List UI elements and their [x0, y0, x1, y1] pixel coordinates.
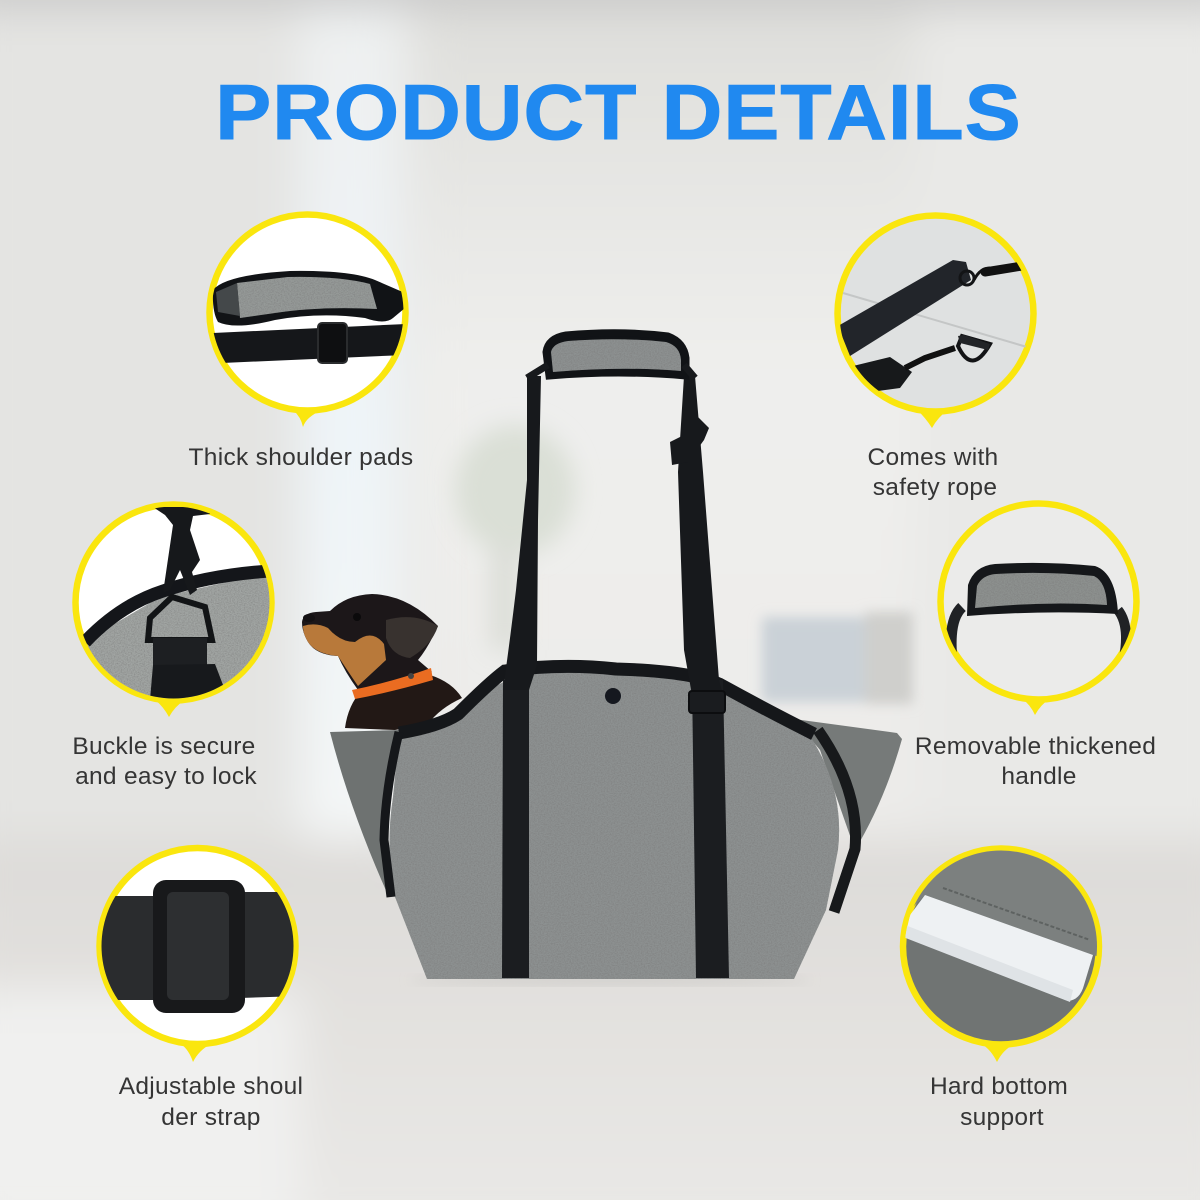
detail: hard bottom [900, 840, 1110, 1131]
close-up image [838, 260, 1027, 392]
dog [302, 594, 462, 730]
shoulder strap right [678, 376, 723, 695]
shoulder strap left [503, 376, 541, 690]
dog head [302, 594, 438, 690]
callout bubble [903, 848, 1099, 1062]
callout bubble [76, 504, 272, 717]
floor shadow [410, 975, 810, 985]
side wing left [330, 730, 400, 895]
detail: adjustable strap: der strap [161, 1104, 261, 1131]
close-up image [951, 563, 1126, 660]
detail: thick shoulder pads [189, 214, 413, 471]
caption: Hard bottom [930, 1073, 1068, 1100]
detail: safety rope: safety rope [873, 474, 997, 501]
detail: safety rope [838, 216, 1034, 501]
detail: buckle [72, 504, 285, 790]
close-up image [95, 880, 300, 1013]
caption: Adjustable shoul [119, 1073, 303, 1100]
detail: adjustable strap [95, 848, 303, 1131]
strap buckle [670, 413, 709, 465]
detail: removable handle: handle [1001, 763, 1077, 790]
dog body [345, 675, 462, 730]
caption: Buckle is secure [72, 733, 256, 760]
close-up image [905, 850, 1097, 1002]
handle pad [546, 333, 686, 376]
bag black binding [399, 666, 814, 734]
detail: removable handle [915, 504, 1156, 790]
bag body [389, 667, 839, 979]
close-up image [83, 507, 270, 698]
snap button [605, 688, 621, 704]
front webbing straps [502, 680, 529, 978]
callout bubble [210, 214, 406, 427]
caption: Comes with [868, 444, 998, 471]
title: PRODUCT DETAILS [215, 70, 1022, 156]
callout bubble [940, 504, 1136, 715]
callout bubble [838, 216, 1034, 428]
close-up image [213, 271, 405, 363]
caption: Removable thickened [915, 733, 1156, 760]
dog muzzle and cheek [303, 624, 386, 686]
side wing right [794, 719, 902, 850]
detail: hard bottom: support [960, 1104, 1044, 1131]
detail: buckle: and easy to lock [75, 763, 257, 790]
product: pet carrier bag with dog [302, 333, 902, 985]
slide buckle [689, 691, 725, 713]
dog ear [386, 617, 438, 658]
callout bubble [100, 848, 296, 1062]
caption: Thick shoulder pads [189, 444, 413, 471]
